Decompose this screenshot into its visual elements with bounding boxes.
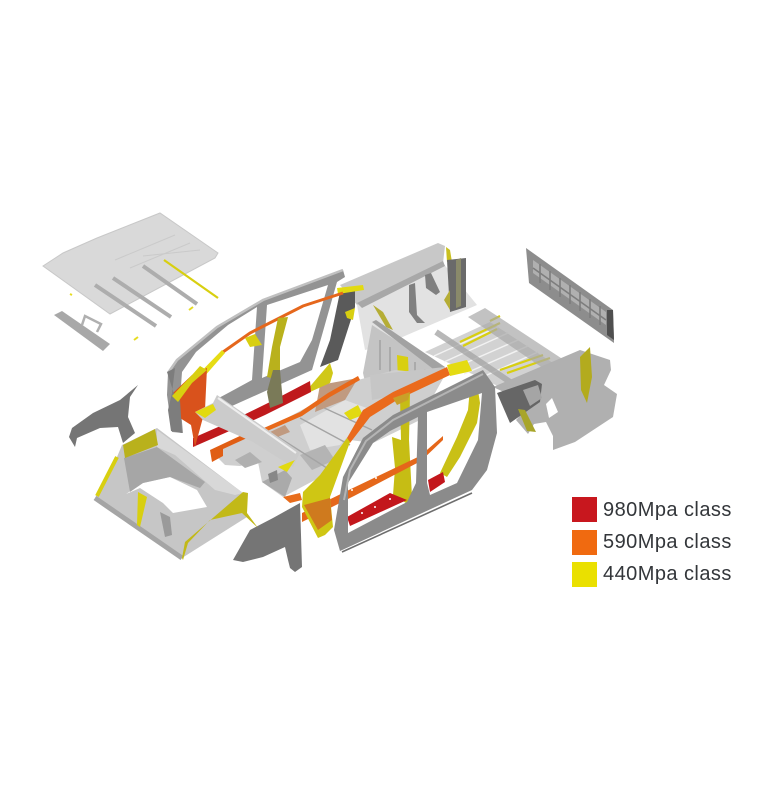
far fender [69, 385, 138, 447]
legend item: 980Mpa class: 980Mpa class [603, 499, 732, 521]
far side frame [167, 270, 364, 433]
far A-pillar orange panel [167, 366, 207, 447]
far orange sill [210, 376, 360, 462]
near door pillars [392, 388, 480, 503]
near A-pillar yellow and orange [302, 438, 350, 538]
near roof rail orange [347, 360, 472, 443]
legend item: 440Mpa class: 440Mpa class [603, 563, 732, 585]
near fender [233, 503, 302, 572]
cowl cross member [195, 395, 300, 472]
bed floor with yellow strips [425, 308, 568, 390]
near side frame [334, 370, 497, 552]
tailgate panel [526, 248, 614, 343]
rear bulkhead [363, 320, 445, 395]
front structure [95, 428, 258, 560]
rear bed far side [340, 243, 477, 350]
rear quarter panel [493, 347, 617, 450]
front roof header [54, 311, 110, 351]
legend [572, 497, 732, 587]
far red sill [193, 370, 311, 447]
roof panel with bows [43, 213, 218, 340]
floor pan [212, 367, 447, 497]
near sill orange and red [283, 436, 445, 526]
legend item: 590Mpa class: 590Mpa class [603, 531, 732, 553]
